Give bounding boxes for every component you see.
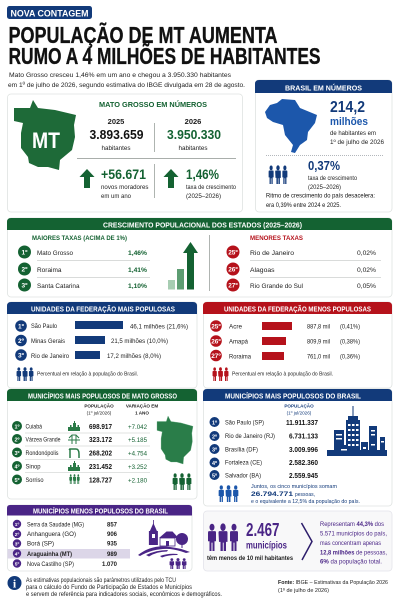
row: Acre: Acre — [229, 324, 242, 330]
row: Mato Grosso: Mato Grosso — [37, 250, 73, 257]
row: Salvador — [210, 470, 318, 480]
intro text: em 1º de julho de 2026, segundo estimativa do IBGE divulgada em 28 de agosto. — [8, 82, 245, 89]
note: juntos: e o equivalente a 12,5% da população do país. — [251, 499, 360, 505]
row: Santa Catarina — [18, 278, 147, 292]
row: Mato Grosso: 1º — [22, 250, 28, 256]
row: Santa Catarina: 3º — [22, 282, 28, 290]
stat: 2026: habitantes — [178, 145, 208, 152]
row: Brasília: 3º — [212, 447, 217, 453]
row: São Paulo: 1º — [212, 420, 217, 426]
text: representam: mas concentram apenas — [320, 541, 381, 547]
panel: mato grosso em números — [8, 94, 242, 212]
row: Serra da Saudade: 1º — [15, 522, 19, 528]
row: Anhanguera: 2º — [15, 532, 19, 538]
row: Rio de Janeiro: 3º — [18, 352, 25, 360]
row: Salvador: Salvador (BA) — [225, 472, 261, 480]
row: São Paulo: 46,1 milhões (21,6%) — [130, 324, 188, 330]
row: Várzea Grande: 323.172 — [89, 435, 112, 444]
row: Anhanguera: Anhanguera (GO) — [27, 531, 76, 538]
row: Rio de Janeiro: Rio de Janeiro — [31, 353, 69, 360]
row: Rio Grande do Sul — [226, 278, 376, 292]
icon: informação: i — [13, 576, 17, 590]
icon: pessoas — [17, 367, 33, 381]
note: juntos — [251, 484, 360, 505]
row: Roraima — [18, 262, 147, 276]
row: Amapá: 26º — [211, 338, 221, 346]
stat: 0,37%: (2025–2026) — [308, 184, 341, 191]
row: Roraima: 1,41% — [128, 267, 147, 274]
icon: seta para cima — [80, 169, 94, 188]
icon: mapa de Mato Grosso: MT — [32, 128, 60, 153]
row: Rio de Janeiro: 2º — [212, 434, 217, 440]
row: Sorriso: Sorriso — [26, 477, 44, 484]
row: Sorriso: 128.727 — [89, 476, 112, 484]
row: Rondonópolis — [12, 448, 147, 458]
panel: crescimento populacional — [7, 218, 392, 297]
source — [278, 580, 388, 594]
note: ritmo de crescimento — [266, 192, 375, 209]
row: Alagoas: 26º — [228, 266, 238, 274]
row: Cuiabá: +7.042 — [128, 424, 147, 431]
row: Várzea Grande — [12, 434, 147, 444]
text: representam: 12,8 milhões de pessoas, — [320, 550, 387, 556]
row: Roraima: 761,0 mil — [307, 354, 330, 360]
row: Sinop: 4º — [14, 464, 20, 470]
row: Rio Grande do Sul: 27º — [228, 282, 238, 290]
panel: municípios mais populosos do Brasil — [203, 389, 392, 506]
row: Anhanguera — [13, 530, 117, 538]
row: Minas Gerais: 2º — [18, 338, 25, 345]
text: representam — [320, 522, 387, 566]
column headers: VARIAÇÃO EM — [126, 402, 158, 408]
subheading: maiores taxas: MAIORES TAXAS (ACIMA DE 1%) — [32, 235, 127, 242]
note: estimativas — [26, 578, 222, 598]
row: Fortaleza: Fortaleza (CE) — [225, 460, 262, 466]
row: Amapá: Amapá — [229, 338, 248, 346]
stat: novos moradores: novos moradores — [101, 184, 148, 191]
row: Nova Castilho: 1.070 — [102, 561, 117, 568]
row: Rondonópolis: +4.754 — [128, 450, 147, 458]
stat: 2025 — [90, 117, 144, 152]
panel: brasil em números — [255, 80, 392, 212]
subheading: menores taxas: MENORES TAXAS — [250, 235, 304, 242]
row: Fortaleza: 2.582.360 — [289, 458, 318, 467]
source: (1º de julho de 2026) — [278, 587, 329, 594]
icon: pessoas — [269, 165, 287, 184]
row: Sinop: +3.252 — [128, 464, 147, 471]
stat: taxa de crescimento: taxa de crescimento — [186, 184, 236, 191]
column header: POPULAÇÃO — [284, 402, 314, 408]
row: Alagoas: 0,02% — [357, 267, 376, 274]
row: Minas Gerais: 21,5 milhões (10,0%) — [111, 338, 168, 345]
stat: 214,2 milhões: de habitantes em — [330, 130, 376, 137]
row: Várzea Grande: +5.185 — [128, 437, 147, 444]
row: Rio Grande do Sul: Rio Grande do Sul — [250, 283, 304, 290]
title: POPULAÇÃO DE MT AUMENTA — [8, 21, 278, 48]
panel: municípios mais populosos de MT — [7, 389, 320, 499]
note: estimativas: para o cálculo do Fundo de Participação de Estados e Municípios — [26, 585, 192, 591]
column header — [284, 402, 314, 416]
row: São Paulo: São Paulo (SP) — [225, 420, 264, 426]
row: Acre — [210, 320, 360, 332]
heading: crescimento populacional: CRESCIMENTO POPULACIONAL DOS ESTADOS (2025–2026) — [103, 220, 302, 230]
row: São Paulo — [210, 417, 318, 427]
column headers: 1 ANO — [135, 410, 149, 416]
row: Brasília: Brasília (DF) — [225, 446, 258, 454]
row: Alagoas — [226, 262, 376, 276]
row: Sinop — [12, 461, 147, 471]
stat: taxa de crescimento: 1,46% — [186, 167, 219, 182]
stat: 2026: 2026 — [185, 117, 201, 126]
heading: UF mais populosas — [7, 302, 197, 314]
heading: municípios do Brasil: MUNICÍPIOS MAIS POPULOSOS DO BRASIL — [225, 392, 361, 400]
row: Roraima — [210, 350, 360, 361]
row: Serra da Saudade — [13, 520, 117, 528]
text: têm menos de 10 mil habitantes: têm menos de 10 mil habitantes — [207, 556, 294, 562]
note: percentual: Percentual em relação à população do Brasil. — [37, 372, 138, 378]
note: juntos: 26.794.771 — [251, 491, 293, 498]
row: Rio de Janeiro: 17,2 milhões (8,0%) — [107, 353, 161, 360]
row: Rondonópolis: 268.202 — [89, 448, 112, 458]
stat: 214,2 milhões: 214,2 — [330, 99, 365, 116]
heading: crescimento populacional — [7, 218, 392, 230]
row: São Paulo — [15, 320, 188, 332]
icon: informação — [8, 576, 22, 590]
row: Cuiabá — [12, 421, 147, 431]
stat: taxa de crescimento — [186, 167, 236, 200]
row: Sorriso: 5º — [14, 478, 20, 484]
row: Amapá — [210, 335, 360, 347]
chart: barras crescentes com seta — [168, 242, 198, 290]
column header: (1º jul/2026) — [287, 410, 312, 416]
intro text — [8, 72, 245, 89]
stat: 2025: 3.893.659 — [90, 127, 144, 142]
stat: 0,37%: 0,37% — [308, 159, 340, 173]
stat: 2026 — [167, 117, 221, 152]
row: Sinop: Sinop — [26, 464, 41, 470]
row: São Paulo: 11.911.337 — [286, 418, 318, 427]
row: Borá: 3º — [15, 542, 19, 548]
icon: mapa do Brasil — [265, 99, 317, 153]
row: Santa Catarina: 1,10% — [128, 283, 147, 290]
icon: mapa de Mato Grosso — [14, 100, 76, 170]
intro text: Mato Grosso cresceu 1,46% em um ano e chegou a 3.950.330 habitantes — [9, 72, 232, 79]
text: representam: 5.571 municípios do país, — [320, 532, 387, 538]
stat: novos moradores: em um ano — [101, 193, 131, 200]
row: Fortaleza: 4º — [212, 461, 217, 467]
row: Mato Grosso — [18, 246, 147, 258]
row: Acre: (0,41%) — [340, 324, 360, 330]
icon: mapa de Mato Grosso — [157, 416, 193, 464]
icon: cidade — [327, 406, 387, 456]
heading: municípios de MT: MUNICÍPIOS MAIS POPULOSOS DE MATO GROSSO — [28, 392, 177, 400]
heading: municípios do Brasil — [203, 389, 392, 401]
row: Roraima: 27º — [211, 353, 221, 360]
column headers: POPULAÇÃO — [84, 402, 114, 408]
row: Brasília — [210, 444, 318, 454]
row: Rio de Janeiro: Rio de Janeiro — [250, 250, 294, 257]
row: Amapá: (0,38%) — [340, 338, 360, 346]
note: ritmo de crescimento: Ritmo de crescimento do país desacelera: — [266, 192, 375, 200]
stat: 214,2 milhões: milhões — [330, 116, 368, 128]
row: Roraima: Roraima — [37, 267, 62, 274]
row: Várzea Grande: 2º — [14, 437, 20, 443]
row: Nova Castilho: Nova Castilho (SP) — [27, 561, 74, 568]
note: percentual: Percentual em relação à população do Brasil. — [232, 372, 333, 378]
row: Araguainha: 989 — [107, 551, 117, 558]
row: Mato Grosso: 1,46% — [128, 250, 147, 257]
stat: 214,2 milhões: 1º de julho de 2026 — [330, 139, 384, 146]
source: Fonte: IBGE – Estimativas da População 2026 — [278, 580, 388, 586]
row: Acre: 887,8 mil — [307, 324, 330, 330]
stat: 0,37%: taxa de crescimento — [308, 175, 357, 182]
stat: novos moradores: +56.671 — [101, 167, 146, 182]
row: Cuiabá: Cuiabá — [26, 424, 42, 430]
row: Serra da Saudade: 857 — [107, 522, 117, 528]
icon: vilarejo — [138, 520, 190, 569]
stat: 2025: habitantes — [101, 145, 131, 152]
row: Cuiabá: 698.917 — [89, 422, 112, 431]
row: Rio de Janeiro — [226, 246, 376, 258]
note: estimativas: As estimativas populacionais são parâmetros utilizados pelo TCU — [26, 578, 176, 584]
heading: UF menos populosas — [203, 302, 392, 314]
row: Santa Catarina: Santa Catarina — [37, 283, 80, 290]
panel: municípios menos populosos — [7, 505, 192, 571]
row: Salvador: 2.559.945 — [289, 471, 318, 480]
row: Anhanguera: 906 — [107, 531, 117, 538]
row: Araguainha: Araguainha (MT) — [27, 551, 72, 558]
row: Cuiabá: 1º — [14, 424, 20, 430]
row: Rondonópolis: 3º — [14, 451, 20, 457]
stat: 2.467: 2.467 — [246, 520, 280, 540]
tag: nova contagem: NOVA CONTAGEM — [10, 8, 89, 20]
row: Araguainha: 4º — [15, 552, 19, 558]
panel: UF mais populosas — [7, 302, 197, 388]
row: São Paulo: 1º — [18, 324, 25, 330]
text: representam: Representam 44,3% dos — [320, 522, 384, 528]
icon: pessoas — [213, 367, 228, 381]
note: juntos: pessoas, — [295, 492, 315, 498]
stat: 0,37% — [308, 159, 357, 191]
row: Rio de Janeiro: Rio de Janeiro (RJ) — [225, 433, 275, 440]
icon: chevron — [302, 523, 312, 560]
row: Rio de Janeiro — [210, 431, 318, 441]
row: Borá: Borá (SP) — [27, 540, 54, 548]
row: Acre: 25º — [211, 324, 221, 330]
stat: novos moradores — [101, 167, 148, 200]
panel: 2.467 municípios — [204, 511, 392, 571]
panel: UF menos populosas — [203, 302, 392, 388]
row: Rio de Janeiro — [15, 349, 161, 361]
heading: municípios de MT — [7, 389, 197, 401]
row: Roraima: Roraima — [229, 354, 251, 360]
stat: taxa de crescimento: (2025–2026) — [186, 193, 221, 200]
stat: 214,2 milhões — [330, 99, 384, 146]
stat: 2025: 2025 — [108, 117, 124, 126]
note: ritmo de crescimento: era 0,39% entre 2024 e 2025. — [266, 202, 341, 209]
row: Roraima: 2º — [22, 266, 28, 274]
row: Alagoas: Alagoas — [250, 267, 275, 274]
highlight: Araguainha — [8, 549, 130, 558]
row: Rio Grande do Sul: 0,05% — [357, 283, 376, 290]
heading: brasil em números: BRASIL EM NÚMEROS — [285, 84, 362, 92]
row: Rio de Janeiro: 0,02% — [357, 250, 376, 257]
row: Araguainha — [13, 549, 117, 558]
note: juntos: Juntos, os cinco municípios somam — [251, 484, 337, 490]
column headers — [84, 402, 158, 416]
row: Salvador: 5º — [212, 473, 217, 479]
row: Sorriso — [12, 474, 147, 484]
row: Serra da Saudade: Serra da Saudade (MG) — [27, 522, 84, 528]
row: São Paulo: São Paulo — [31, 323, 57, 330]
heading: UF menos populosas: UNIDADES DA FEDERAÇÃO MENOS POPULOSAS — [224, 304, 371, 314]
text: representam: 6% da população total. — [320, 560, 382, 566]
icon: pessoas — [219, 485, 238, 502]
row: Rondonópolis: Rondonópolis — [26, 450, 58, 457]
icon: seta para cima — [164, 169, 178, 188]
row: Sorriso: +2.180 — [128, 478, 147, 484]
note: estimativas: e servem de referência para indicadores sociais, econômicos e demográficos. — [26, 592, 222, 598]
stat: 2.467 — [246, 520, 287, 552]
heading: municípios menos populosos: MUNICÍPIOS MENOS POPULOSOS DO BRASIL — [33, 506, 168, 516]
stat: 2026: 3.950.330 — [167, 127, 221, 142]
row: Minas Gerais — [15, 335, 168, 346]
row: Várzea Grande: Várzea Grande — [26, 436, 61, 444]
row: Nova Castilho: 5º — [15, 562, 19, 568]
title — [8, 21, 320, 69]
row: Minas Gerais: Minas Gerais — [31, 338, 66, 345]
stat: 2.467: municípios — [246, 540, 287, 552]
row: Nova Castilho — [13, 559, 117, 568]
row: Roraima: (0,36%) — [340, 354, 360, 360]
row: Rio de Janeiro: 25º — [228, 250, 238, 256]
row: Sinop: 231.452 — [89, 462, 112, 471]
heading: mato grosso em números: MATO GROSSO EM NÚMEROS — [99, 100, 207, 109]
icon: pessoas — [208, 523, 238, 551]
row: Amapá: 809,9 mil — [307, 338, 330, 346]
row: Rio de Janeiro: 6.731.133 — [289, 432, 318, 440]
row: Borá: 935 — [107, 540, 117, 548]
heading: UF mais populosas: UNIDADES DA FEDERAÇÃO MAIS POPULOSAS — [31, 304, 175, 314]
row: Brasília: 3.009.996 — [289, 445, 318, 454]
row: Borá — [13, 539, 117, 548]
column headers: (1º jul/2026) — [87, 410, 112, 416]
row: Fortaleza — [210, 458, 318, 468]
icon: pessoas — [173, 473, 191, 490]
